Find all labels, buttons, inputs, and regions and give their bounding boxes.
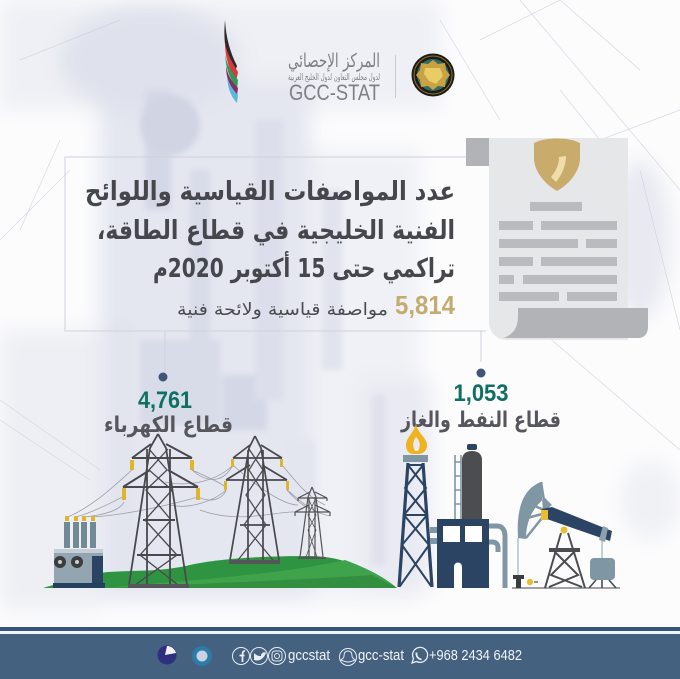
- connector frame: [65, 157, 486, 372]
- icon: gold shield: [534, 138, 580, 191]
- tower 3 base: [298, 557, 326, 559]
- logo text: لدول مجلس التعاون لدول الخليج العربية: [288, 73, 380, 83]
- document text lines: [499, 202, 617, 301]
- green hill: [43, 556, 397, 588]
- handle: gcc-stat: gcc-stat: [358, 648, 404, 664]
- stat: electricity: 4,761: [138, 387, 192, 414]
- transformer: [53, 516, 105, 588]
- flame: [406, 424, 427, 454]
- flare derrick: [399, 424, 432, 587]
- icon: document scroll: [466, 138, 648, 340]
- emblem: GCC seal: [412, 54, 454, 96]
- icon: snapchat: [340, 648, 356, 666]
- tower 2 insulators: [224, 459, 289, 490]
- icons: facebook twitter instagram: [232, 648, 286, 664]
- dot: electricity connector: [158, 372, 168, 382]
- total: 5,814 standards: مواصفة قياسية ولائحة فنية: [177, 300, 388, 320]
- title: عدد المواصفات القياسية واللوائح: [85, 177, 455, 207]
- phone number: +968 2434 6482: [429, 648, 522, 664]
- power lines: [68, 465, 330, 517]
- stat: oil and gas: 1,053: [454, 380, 508, 407]
- logo text: GCC-STAT: [289, 80, 380, 105]
- title: الفنية الخليجية في قطاع الطاقة،: [97, 216, 455, 246]
- stat: oil and gas: [400, 380, 561, 433]
- tower 1: [123, 434, 198, 585]
- footer partner logos: [158, 646, 212, 666]
- logo: GCC-STAT: [224, 20, 454, 105]
- stat: electricity: قطاع الكهرباء: [104, 413, 233, 438]
- dot: oil and gas connector: [476, 368, 486, 378]
- pumpjack: [512, 482, 620, 588]
- tower 2 base: [229, 560, 280, 564]
- stat: electricity: [104, 387, 233, 438]
- footer social and contact: [232, 647, 522, 666]
- tower 1 base: [128, 584, 189, 588]
- refinery: [430, 444, 505, 588]
- tower 2: [226, 436, 287, 560]
- footer band: [0, 627, 680, 679]
- total: 5,814 standards: 5,814: [395, 290, 455, 320]
- icon: whatsapp: [412, 647, 428, 663]
- total: 5,814 standards: [177, 290, 455, 320]
- title: تراكمي حتى 15 أكتوبر 2020م: [153, 251, 455, 284]
- logo text: المركز الإحصائي: [288, 50, 380, 72]
- logo ribbon: [224, 20, 238, 103]
- stat: oil and gas: قطاع النفط والغاز: [400, 408, 561, 433]
- tower 3: [295, 487, 330, 557]
- tower 1 insulators: [122, 460, 200, 500]
- handle: gccstat: gccstat: [288, 648, 330, 664]
- logo text: [288, 50, 380, 105]
- title: [85, 177, 455, 284]
